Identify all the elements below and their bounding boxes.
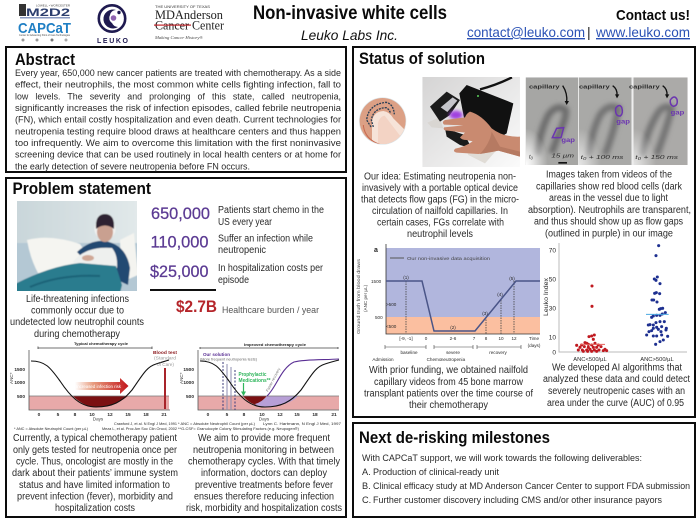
- chart: ANC timeline: [356, 244, 541, 362]
- caption: AI algorithms: We developed AI algorithms that: [552, 362, 682, 374]
- chart: ANC timeline: 7: [473, 336, 476, 341]
- caption: AI algorithms: area under the curve (AUC) of 0.95: [547, 398, 684, 409]
- contact heading: Contact us!: [616, 7, 690, 24]
- stat: 110,000 infections: [150, 234, 313, 256]
- stat: $25,000 hospitalization: In hospitalization costs per: [218, 263, 324, 274]
- caption: typical cycle: Currently, a typical chemotherapy patient: [13, 433, 177, 444]
- chart: Leuko index scatter: ANC<500/µL: [573, 357, 608, 363]
- stat: $2.7B burden: [176, 297, 319, 316]
- chart: improved chemotherapy cycle: 500: [186, 394, 194, 400]
- chart: Leuko index scatter: 0: [552, 350, 556, 356]
- chart: improved chemotherapy cycle: 10: [259, 412, 265, 418]
- figure: capillary video frames: t₀ + 150 ms: [635, 155, 678, 161]
- caption: prior funding: their chemotherapy: [409, 400, 488, 411]
- chart: ANC timeline: 8: [485, 336, 488, 341]
- stat: 110,000 infections: Suffer an infection while: [218, 234, 313, 244]
- caption: our idea: [361, 172, 519, 240]
- figure: capillary video frames: gap: [561, 138, 575, 144]
- frame 3: [633, 77, 688, 165]
- chart: ANC timeline: Time: [529, 336, 539, 341]
- chart: typical chemotherapy cycle: of Care): [157, 362, 175, 367]
- photo caption: [10, 294, 144, 340]
- chart: ANC timeline: recovery: [489, 350, 508, 355]
- figure: capillary video frames: capillary: [629, 85, 660, 91]
- chart: improved chemotherapy cycle: 0: [207, 412, 210, 418]
- chart: ANC timeline: (5): [509, 276, 515, 281]
- chart: improved chemotherapy cycle: 1500: [183, 367, 194, 373]
- chart: improved chemotherapy cycle: 1000: [183, 380, 194, 386]
- panel: abstract: [6, 47, 346, 172]
- caption: typical cycle: [12, 433, 178, 514]
- contact links: |: [587, 24, 591, 40]
- chart: improved chemotherapy cycle: (More frequent neutropenia tests): [200, 358, 258, 362]
- caption: capillary images: and thus should show up as flow gaps: [534, 216, 683, 228]
- chart: ANC timeline: 10: [498, 336, 504, 341]
- panel: problem statement: [6, 178, 346, 517]
- chart citations left: [14, 422, 177, 431]
- caption: our idea: circulation of nailfold capillaries. In: [372, 206, 508, 217]
- caption: typical cycle: dark about their patients’ immune system: [12, 468, 178, 479]
- chart: typical chemotherapy cycle: 15: [125, 412, 131, 418]
- frame 1: [526, 77, 578, 165]
- chart: ANC timeline: (4): [497, 292, 503, 297]
- caption: our idea: invasively with a portable optical device: [362, 183, 518, 194]
- chart: improved chemotherapy cycle: ANC*: [179, 372, 184, 384]
- logo: M2D2 and CAPCaT: CAPCaT: [18, 20, 71, 37]
- milestones list: Production of clinical-ready unit: [373, 467, 499, 477]
- milestones list: C.: [362, 495, 371, 505]
- chart: typical chemotherapy cycle: 1000: [14, 380, 25, 386]
- caption: our idea: certain cases, FGs correlate with: [377, 218, 504, 228]
- chart: ANC timeline: Ground truth from blood draws: [356, 258, 361, 334]
- stat: $25,000 hospitalization: [150, 263, 324, 286]
- chart: improved chemotherapy cycle: 15: [294, 412, 300, 418]
- chart: typical chemotherapy cycle: 500: [17, 394, 25, 400]
- stat: $2.7B burden: Healthcare burden / year: [222, 305, 319, 316]
- chart: improved chemotherapy cycle: 12: [277, 412, 283, 418]
- chart: ANC timeline: (3): [482, 311, 488, 316]
- chart: Leuko index scatter: [543, 243, 687, 363]
- figure: capillary video frames: gap: [616, 120, 630, 126]
- chart: ANC timeline: neutropenia: [441, 357, 466, 362]
- photo: patient in bed: [15, 199, 139, 293]
- chart: Leuko index scatter: 10: [549, 334, 556, 342]
- caption: improved cycle: chemotherapy cycles. With that timely: [188, 456, 340, 468]
- chart: typical chemotherapy cycle: Typical chemotherapy cycle: [74, 342, 128, 346]
- milestones list: With CAPCaT support, we will work towards the following deliverables:: [362, 453, 642, 463]
- chart: typical chemotherapy cycle: 0: [38, 412, 41, 418]
- figure: capillary video frames: t₀ + 100 ms: [581, 155, 624, 161]
- logo: MD Anderson Cancer Center: [154, 5, 225, 40]
- stat: $25,000 hospitalization: episode: [218, 275, 249, 286]
- chart: typical chemotherapy cycle: ANC*: [9, 372, 14, 384]
- frame 2: [579, 77, 632, 165]
- caption: prior funding: With prior funding, we obtained nailfold: [369, 365, 528, 376]
- figure: capillary video frames: capillary: [529, 85, 560, 91]
- chart citations left: Crawford J, et al. N Engl J Med, 1991: [114, 422, 177, 426]
- chart: typical chemotherapy cycle: 1500: [14, 367, 25, 373]
- chart: ANC timeline: 2-6: [450, 336, 457, 341]
- chart: improved chemotherapy cycle: Improved chemotherapy cycle: [244, 343, 306, 347]
- logo: MD Anderson Cancer Center: THE UNIVERSITY OF TEXAS: [155, 5, 211, 9]
- stat: 650,000 patients: US every year: [218, 217, 273, 228]
- chart: ANC timeline: severe: [446, 350, 460, 355]
- abstract text: the early detection of severe neutropenia before FN occurs.: [15, 161, 250, 172]
- icon: fingernail capillaries: [359, 98, 406, 144]
- chart: typical chemotherapy cycle: 18: [143, 412, 149, 418]
- milestones list: [362, 453, 690, 505]
- chart: ANC timeline: [-9, -1]: [399, 336, 413, 341]
- chart: ANC timeline: baseline: [400, 350, 418, 355]
- chart: Leuko index scatter: Leuko Index: [543, 277, 550, 316]
- stat: 650,000 patients: [151, 205, 324, 228]
- caption: improved cycle: preventive treatments before fever: [195, 480, 334, 491]
- abstract text: low levels. The severity and prolonging of this state, called neutropenia,: [15, 91, 341, 102]
- chart: improved chemotherapy cycle: 8: [243, 412, 246, 418]
- chart: ANC timeline: 0: [425, 336, 428, 341]
- caption: prior funding: [364, 365, 533, 411]
- chart: improved chemotherapy cycle: [179, 343, 339, 422]
- chart: ANC timeline: (days): [528, 343, 541, 348]
- chart citations left: Meza L, et al. Proc Am Soc Clin Oncol, 2002: [102, 427, 177, 431]
- chart: improved chemotherapy cycle: Prophylactic: [238, 372, 267, 378]
- caption: improved cycle: risk, morbidity and hospitalization costs: [186, 503, 342, 514]
- caption: capillary images: Images taken from videos of the: [546, 170, 672, 180]
- caption: typical cycle: cycle. Thus, oncologist are mostly in the: [16, 456, 173, 468]
- caption: capillary images: [528, 170, 691, 240]
- chart: ANC timeline: (1): [403, 275, 409, 280]
- caption: improved cycle: ensues therefore reducing infection: [194, 492, 334, 502]
- title: Non-invasive white cells: [253, 3, 447, 24]
- abstract text: [15, 68, 342, 172]
- caption: our idea: Our idea: Estimating neutropenia non-: [364, 172, 516, 182]
- photo caption: during chemotherapy: [34, 329, 120, 340]
- figure: capillary video frames: gap: [671, 110, 685, 116]
- caption: improved cycle: We aim to provide more frequent: [198, 433, 330, 444]
- chart: improved chemotherapy cycle: 21: [331, 412, 337, 418]
- contact links: www.leuko.com: [595, 24, 690, 40]
- caption: capillary images: (outlined in purple) in our image: [545, 228, 673, 240]
- caption: AI algorithms: severely neutropenic cases with an: [548, 386, 685, 397]
- chart: ANC timeline: (ANC per µL): [363, 284, 368, 312]
- status heading: Status of solution: [359, 49, 485, 68]
- caption: typical cycle: only gets tested for neutropenia once per: [13, 445, 178, 456]
- stat: 650,000 patients: 650,000: [151, 205, 210, 223]
- figure: capillary video frames: t₀: [529, 155, 534, 161]
- chart citations right: **G-CSF= Granulocyte Colony Stimulating Factors (e.g. Neupogen®): [178, 427, 300, 431]
- chart: typical chemotherapy cycle: 21: [161, 412, 167, 418]
- figure: capillary video frames: [526, 77, 688, 165]
- chart: ANC timeline: Chemo: [427, 357, 442, 362]
- chart: Leuko index scatter: 50: [549, 276, 556, 284]
- caption: improved cycle: neutropenia monitoring in between: [193, 445, 334, 456]
- abstract text: significantly increases the risk of infection episodes, called febrile neutropenia: [15, 103, 342, 114]
- chart: ANC timeline: <500: [386, 324, 397, 329]
- photo caption: undetected low neutrophil counts: [10, 317, 144, 328]
- chart: ANC timeline: Our non-invasive data acquisition: [407, 256, 491, 261]
- chart: improved chemotherapy cycle: Faster recovery: [265, 367, 281, 392]
- logo: M2D2 and CAPCaT: M2D2: [26, 7, 70, 19]
- contact links: [467, 24, 690, 40]
- logo: Leuko: [97, 5, 129, 45]
- chart: ANC timeline: 1500: [371, 279, 382, 284]
- stat: $25,000 hospitalization: $25,000: [150, 263, 208, 281]
- chart: Leuko index scatter: ANC>500/µL: [640, 357, 675, 363]
- chart: typical chemotherapy cycle: Days: [93, 416, 104, 422]
- abstract text: neutropenia testing require blood draws at healthcare centers and thus happen: [15, 126, 341, 137]
- milestones list: B.: [362, 481, 371, 491]
- milestones list: A.: [362, 467, 371, 477]
- abstract text: (FN), which entail costly hospitalization and even death. Current technologies for: [15, 115, 342, 126]
- stat: 110,000 infections: 110,000: [150, 234, 208, 252]
- chart: typical chemotherapy cycle: 12: [107, 412, 113, 418]
- chart: ANC timeline: Admission: [372, 357, 394, 362]
- chart citations right: [178, 422, 341, 431]
- abstract text: effect, their neutrophils, the most common white cells fighting infection, fall to: [15, 80, 341, 91]
- chart: ANC timeline: 12: [511, 336, 517, 341]
- chart: ANC timeline: a: [374, 247, 378, 254]
- caption: typical cycle: prevent infection (fever), morbidity and: [17, 492, 173, 502]
- chart: typical chemotherapy cycle: 5: [57, 412, 60, 418]
- chart: ANC timeline: 500: [375, 315, 383, 320]
- chart: improved chemotherapy cycle: Days: [259, 416, 270, 422]
- chart: ANC timeline: >500: [386, 302, 397, 307]
- abstract text: Every year, 650,000 new cancer patients are treated with chemotherapy. As a side: [15, 68, 341, 79]
- caption: capillary images: areas in the vessel due to light: [549, 193, 668, 204]
- milestones list: Clinical efficacy study at MD Anderson Cancer Center to support FDA submission: [373, 481, 690, 491]
- chart: ANC timeline: (2): [450, 325, 456, 330]
- chart: typical chemotherapy cycle: 8: [74, 412, 77, 418]
- chart: Leuko index scatter: 70: [549, 248, 556, 254]
- chart: typical chemotherapy cycle: Blood test: [153, 350, 178, 355]
- photo caption: commonly occur due to: [31, 306, 124, 316]
- abstract heading: Abstract: [15, 50, 75, 69]
- chart: typical chemotherapy cycle: [9, 342, 178, 422]
- chart citations right: Lynn C. Hartmann, N Engl J Med, 1997: [263, 422, 341, 426]
- caption: prior funding: capillary videos from 45 bone marrow: [374, 377, 524, 388]
- chart: improved chemotherapy cycle: Medications**: [238, 378, 271, 384]
- logo: MD Anderson Cancer Center: Making Cancer History®: [154, 35, 204, 40]
- caption: our idea: that detects flow gaps (FG) in the micro-: [361, 194, 519, 206]
- stat: 650,000 patients: Patients start chemo in the: [218, 205, 324, 216]
- chart: improved chemotherapy cycle: 18: [312, 412, 318, 418]
- chart: improved chemotherapy cycle: 5: [226, 412, 229, 418]
- milestones list: Further customer discovery including CMS and/or other insurance payors: [373, 495, 662, 505]
- chart: typical chemotherapy cycle: Increased infection risk: [76, 384, 122, 390]
- photo caption: Life-threatening infections: [26, 294, 129, 305]
- figure: capillary video frames: capillary: [579, 85, 610, 91]
- caption: capillary images: capillaries show red blood cells (dark: [536, 182, 683, 192]
- logo: M2D2 and CAPCaT: Center for Advancing Point of Care Technologies: [19, 33, 71, 37]
- chart: typical chemotherapy cycle: 10: [89, 412, 95, 418]
- chart citations left: * ANC = Absolute Neutrophil Count (per µL): [14, 427, 89, 431]
- caption: typical cycle: status and have limited information to: [19, 480, 170, 491]
- milestones heading: Next de-risking milestones: [359, 428, 550, 447]
- contact links: contact@leuko.com: [467, 24, 585, 40]
- logo: Leuko: LEUKO: [97, 38, 129, 45]
- abstract text: too infrequently. We aim to overcome this limitation with the first noninvasive: [15, 138, 341, 149]
- figure: capillary video frames: 15 µm: [551, 153, 574, 159]
- logo: MD Anderson Cancer Center: MDAnderson: [155, 8, 224, 22]
- caption: typical cycle: hospitalization costs: [55, 503, 135, 514]
- abstract text: screening device that can be used routinely in local health centers or at home for: [15, 150, 342, 161]
- logo: M2D2 and CAPCaT: [18, 4, 71, 42]
- photo: optical device with hand: [422, 77, 520, 167]
- chart citations right: * ANC = Absolute Neutrophil Count (per µL): [178, 422, 256, 426]
- problem heading: Problem statement: [12, 179, 151, 198]
- logo: M2D2 and CAPCaT: LOWELL • WORCESTER: [36, 4, 70, 8]
- caption: AI algorithms: [543, 362, 690, 409]
- logo: MD Anderson Cancer Center: Cancer Center: [155, 18, 225, 32]
- panel: status of solution: [353, 47, 695, 417]
- subtitle: Leuko Labs Inc.: [301, 27, 398, 43]
- caption: improved cycle: information, doctors can deploy: [201, 468, 327, 479]
- chart: improved chemotherapy cycle: Our solution: [203, 352, 230, 357]
- panel: next de-risking milestones: [353, 423, 695, 517]
- caption: improved cycle: [186, 433, 342, 514]
- caption: prior funding: transplant patients over the time course of: [364, 388, 533, 400]
- caption: our idea: neutrophil levels: [407, 229, 473, 240]
- stat: 110,000 infections: neutropenic: [218, 245, 266, 256]
- chart: Leuko index scatter: 30: [549, 306, 556, 312]
- stat: $2.7B burden: $2.7B: [176, 297, 217, 316]
- chart: typical chemotherapy cycle: (Standard: [154, 356, 177, 360]
